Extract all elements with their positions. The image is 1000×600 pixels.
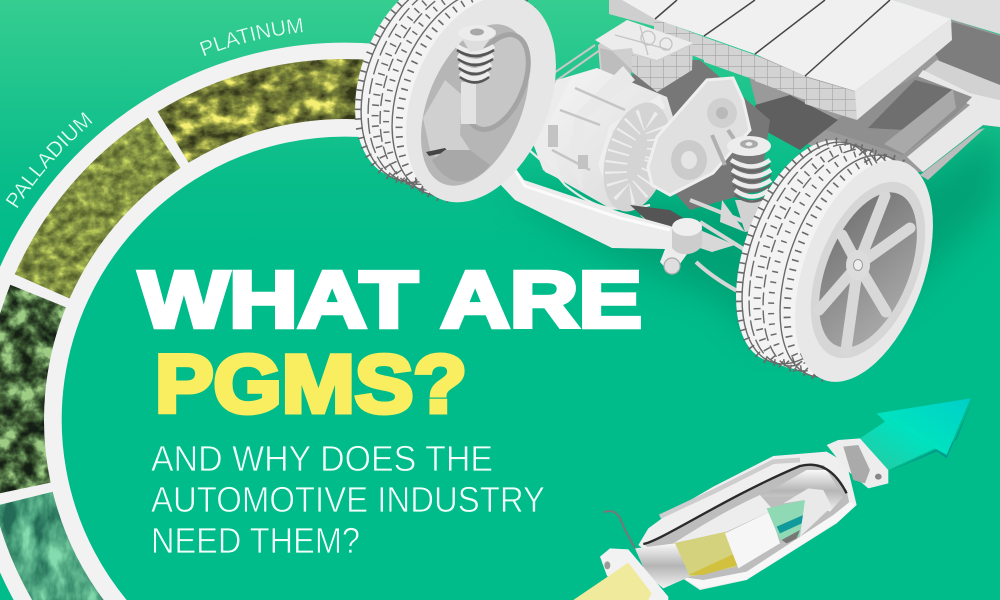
tyre tread [709, 121, 952, 398]
chassis frame and trays [745, 0, 1000, 180]
heading: what are: WHAT ARE [139, 255, 642, 344]
spokes [819, 196, 910, 350]
shadow under chassis [500, 125, 1000, 340]
exhaust catalytic converter with arrow [573, 398, 972, 600]
label: platinum: PLATINUM [200, 18, 303, 56]
battery pack [609, 0, 952, 120]
subtitle [151, 438, 545, 561]
ring frame [15, 90, 375, 600]
heading: PGMs: PGMS? [155, 339, 467, 430]
subtitle: NEED THEM? [151, 520, 360, 561]
arrow head: exit flow [860, 398, 972, 472]
dark floor behind motor [610, 60, 770, 210]
gearbox [648, 78, 750, 195]
label: palladium: PALLADIUM [6, 112, 92, 208]
wheel: rear left [326, 0, 585, 225]
subtitle: AUTOMOTIVE INDUSTRY [151, 479, 545, 520]
brake and hub [423, 80, 470, 180]
label baseline arc [7, 30, 345, 225]
car chassis illustration [326, 0, 1000, 401]
exhaust inner: yellow section [673, 532, 737, 577]
sidewall [768, 141, 960, 401]
control unit box [595, 20, 693, 92]
catalyst core [725, 512, 780, 568]
title [139, 255, 642, 561]
electric motor [485, 45, 682, 219]
sample: platinum rock [158, 59, 364, 163]
ring of metal samples [0, 18, 370, 600]
hub [846, 250, 870, 280]
sample: palladium rock [14, 118, 180, 298]
right strut [720, 136, 780, 232]
arrow tail: intake flow [573, 563, 652, 600]
outlet flange [827, 438, 888, 488]
oxygen sensor wire [603, 511, 635, 548]
converter shell [638, 452, 857, 590]
wheel well [400, 9, 550, 201]
exhaust inner: teal section [767, 500, 805, 540]
sample: ruthenium rock [0, 492, 104, 600]
inlet flange and pipe [573, 543, 690, 600]
rim well [788, 165, 948, 375]
wheel: front right [709, 121, 960, 401]
sample: rhodium rock [0, 284, 66, 494]
sidewall [377, 0, 585, 225]
subtitle: AND WHY DOES THE [151, 438, 493, 479]
left strut [457, 25, 496, 124]
tyre tread [326, 0, 578, 222]
front axle beam [458, 134, 745, 295]
